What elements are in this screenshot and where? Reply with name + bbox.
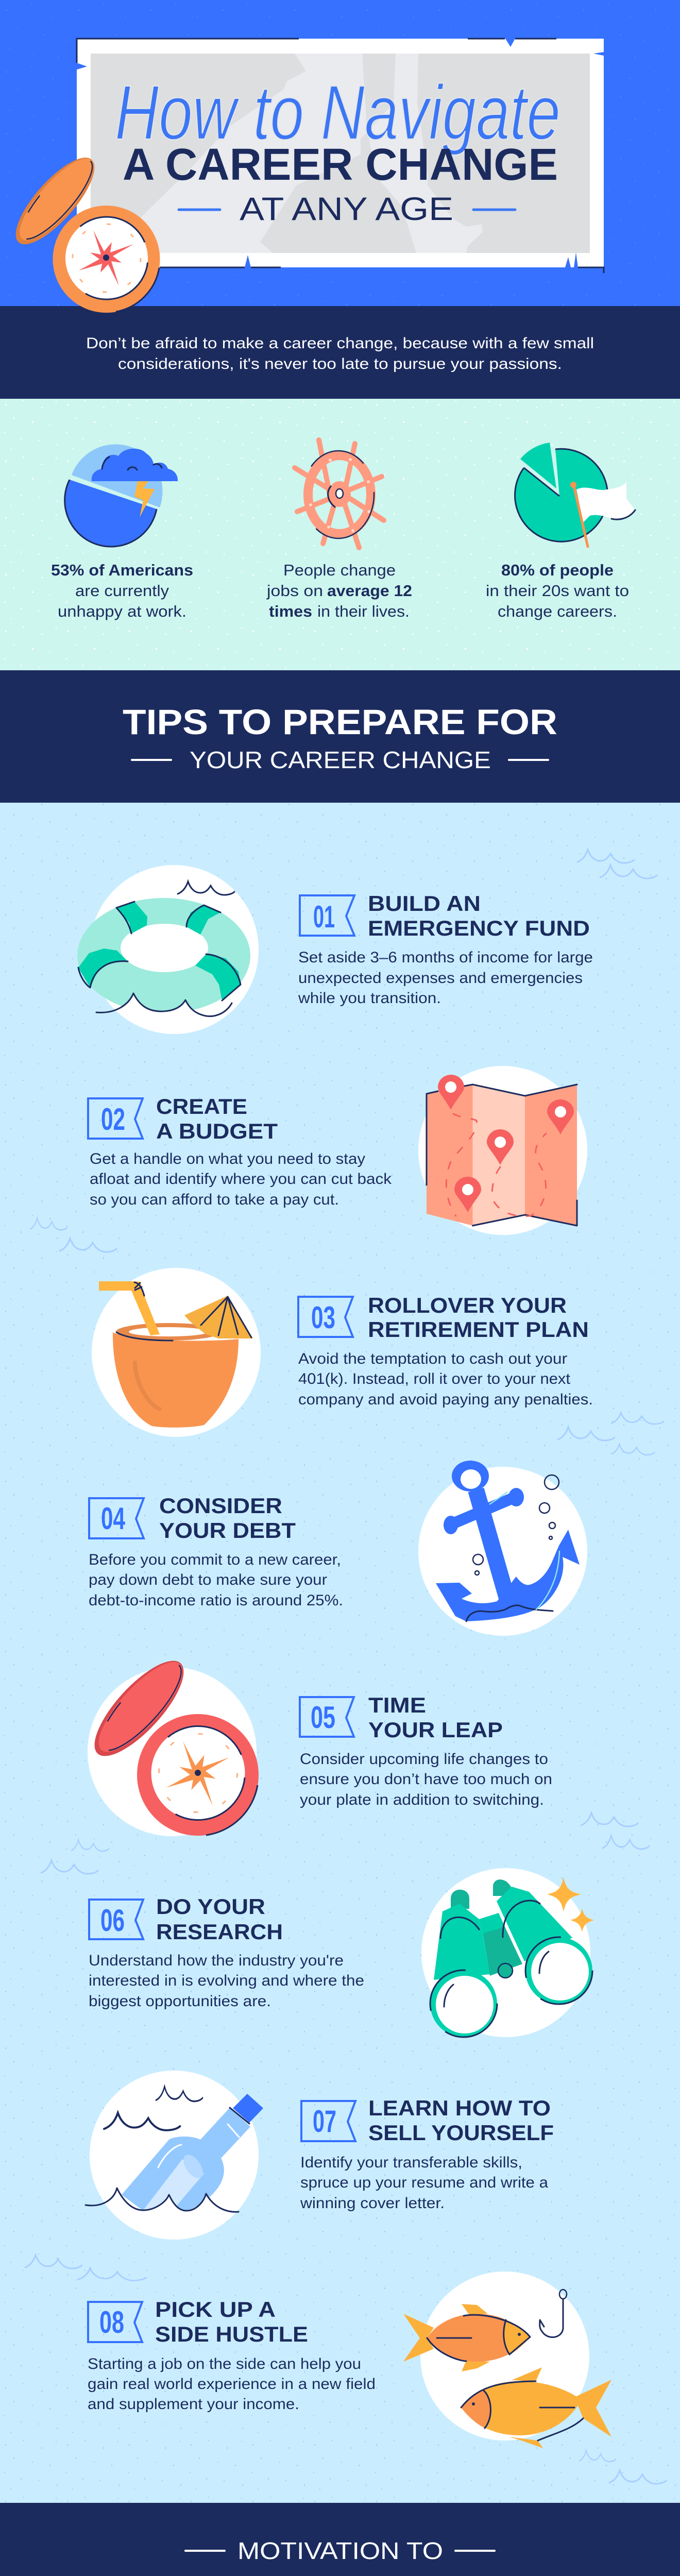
body text: Identify your transferable skills,: [300, 2154, 522, 2171]
body text: [300, 2154, 548, 2212]
heading: SELL YOURSELF: [368, 2121, 554, 2145]
number badge 01: [300, 895, 354, 936]
body text: [88, 2355, 376, 2413]
stat text: [51, 561, 193, 620]
title: How to Navigate: How to Navigate: [115, 69, 560, 156]
heading band: tips to prepare: TIPS TO PREPARE FOR: [123, 702, 557, 742]
illustration: anchor: [418, 1461, 587, 1636]
body text: Avoid the temptation to cash out your: [298, 1350, 567, 1367]
title: A Career Change: A CAREER CHANGE: [123, 140, 558, 190]
heading: [155, 2297, 308, 2346]
intro band: Don’t be afraid to make a career change, because with a few small: [86, 335, 594, 352]
panel: tip 6 research: [89, 1868, 594, 2037]
icon: flagged pie chart: [515, 443, 635, 547]
heading: A BUDGET: [156, 1119, 278, 1143]
body text: gain real world experience in a new field: [88, 2376, 376, 2393]
body text: pay down debt to make sure your: [89, 1571, 327, 1588]
number badge 05: [300, 1697, 354, 1737]
stat text: [486, 561, 629, 620]
panel: stat 12 jobs: [266, 440, 412, 620]
illustration: binoculars: [421, 1868, 594, 2037]
heading: ROLLOVER YOUR: [368, 1293, 567, 1317]
heading: DO YOUR: [156, 1894, 265, 1919]
stat text: average 12: [327, 582, 412, 600]
heading: PICK UP A: [155, 2297, 276, 2321]
number badge 07: [301, 2101, 355, 2141]
heading band: tips to prepare: [0, 670, 680, 803]
panel: tip 2 budget: [88, 1066, 587, 1235]
stat text: in their 20s want to: [486, 582, 629, 600]
panel: tip 3 retirement: [92, 1268, 593, 1437]
body text: [298, 1350, 593, 1408]
number badge 04: [89, 1498, 144, 1538]
body text: ensure you don’t have too much on: [300, 1771, 552, 1788]
number badge 05: 05: [311, 1700, 335, 1735]
body text: 401(k). Instead, roll it over to your next: [298, 1370, 571, 1387]
body text: company and avoid paying any penalties.: [298, 1391, 593, 1408]
body text: interested in is evolving and where the: [89, 1972, 364, 1989]
heading: [368, 2096, 554, 2145]
illustration: folded map: [418, 1066, 587, 1235]
heading: [156, 1894, 283, 1944]
illustration: life ring: [77, 865, 259, 1034]
stat text: [266, 561, 412, 620]
panel: tip 8 side hustle: [88, 2272, 611, 2448]
body text: Understand how the industry you're: [89, 1952, 344, 1969]
title: At Any Age with dashes: AT ANY AGE: [240, 191, 453, 227]
number badge 08: [88, 2302, 142, 2342]
heading band: motivation: MOTIVATION TO: [237, 2537, 443, 2564]
stat text: are currently: [75, 582, 169, 600]
stat text: 80% of people: [501, 561, 614, 579]
number badge 01: 01: [313, 900, 335, 934]
stat text: change careers.: [498, 602, 617, 620]
heading: RETIREMENT PLAN: [368, 1317, 589, 1342]
number badge 06: 06: [100, 1903, 125, 1938]
heading: RESEARCH: [156, 1920, 283, 1944]
body text: Starting a job on the side can help you: [88, 2355, 361, 2372]
panel: tip 4 debt: [89, 1461, 587, 1636]
heading: [368, 1693, 503, 1742]
body text: spruce up your resume and write a: [300, 2174, 548, 2191]
number badge 08: 08: [99, 2305, 124, 2340]
heading: LEARN HOW TO: [368, 2096, 551, 2120]
heading: CONSIDER: [159, 1494, 282, 1518]
heading: SIDE HUSTLE: [155, 2322, 308, 2346]
intro band: considerations, it's never too late to pursue your passions.: [118, 355, 562, 372]
section background: tips: [0, 803, 680, 2503]
heading band: tips to prepare: YOUR CAREER CHANGE: [190, 747, 491, 773]
heading: [156, 1094, 278, 1143]
section background: hero: [0, 0, 680, 306]
body text: Get a handle on what you need to stay: [90, 1150, 365, 1167]
number badge 02: 02: [101, 1102, 125, 1137]
stat text: times: [269, 602, 312, 620]
stat text: unhappy at work.: [58, 602, 186, 620]
number badge 03: [298, 1297, 353, 1337]
heading: TIME: [368, 1693, 426, 1717]
intro band: [0, 306, 680, 399]
number badge 02: [88, 1098, 143, 1139]
number badge 07: 07: [313, 2104, 336, 2139]
heading: [368, 891, 590, 940]
icon: ship wheel: [295, 440, 384, 548]
body text: biggest opportunities are.: [89, 1993, 271, 2010]
body text: Set aside 3–6 months of income for large: [298, 949, 593, 966]
body text: [298, 949, 593, 1007]
heading: BUILD AN: [368, 891, 481, 916]
stat text: 53% of Americans: [51, 561, 193, 579]
body text: [89, 1952, 364, 2010]
illustration: message in a bottle: [86, 2071, 263, 2240]
heading: [159, 1494, 296, 1543]
title map panel: [77, 39, 604, 273]
stat text: People change: [283, 561, 396, 579]
body text: [300, 1751, 552, 1808]
stat text: jobs on: [266, 582, 323, 600]
decorative waves: [25, 850, 666, 2484]
body text: debt-to-income ratio is around 25%.: [89, 1592, 343, 1609]
panel: stat 53 percent: [51, 444, 193, 620]
body text: afloat and identify where you can cut back: [90, 1171, 392, 1188]
heading: YOUR LEAP: [368, 1718, 503, 1742]
panel: tip 5 leap: [81, 1648, 552, 1839]
section background: stats: [0, 399, 680, 670]
heading band: motivation: [0, 2503, 680, 2576]
body text: your plate in addition to switching.: [300, 1791, 544, 1808]
stat text: in their lives.: [317, 602, 410, 620]
heading: [368, 1293, 589, 1342]
panel: tip 7 sell yourself: [86, 2071, 554, 2240]
body text: [90, 1150, 392, 1208]
number badge 06: [89, 1900, 143, 1939]
body text: so you can afford to take a pay cut.: [90, 1191, 339, 1208]
body text: while you transition.: [298, 990, 441, 1007]
panel: tip 1 emergency fund: [77, 865, 593, 1034]
illustration: coconut drink: [92, 1268, 261, 1437]
illustration: red compass: [81, 1648, 264, 1839]
body text: Before you commit to a new career,: [89, 1551, 341, 1568]
icon: orange compass: [4, 147, 165, 316]
icon: storm pie chart: [65, 444, 178, 547]
body text: winning cover letter.: [300, 2195, 445, 2212]
panel: stat 80 percent: [486, 443, 635, 620]
heading: CREATE: [156, 1094, 247, 1118]
body text: and supplement your income.: [88, 2396, 299, 2413]
number badge 03: 03: [311, 1300, 335, 1335]
illustration: fish and hook: [403, 2272, 611, 2448]
body text: [89, 1551, 343, 1609]
body text: Consider upcoming life changes to: [300, 1751, 548, 1768]
heading: YOUR DEBT: [159, 1518, 296, 1543]
body text: unexpected expenses and emergencies: [298, 970, 583, 987]
number badge 04: 04: [101, 1501, 125, 1536]
heading: EMERGENCY FUND: [368, 916, 590, 940]
